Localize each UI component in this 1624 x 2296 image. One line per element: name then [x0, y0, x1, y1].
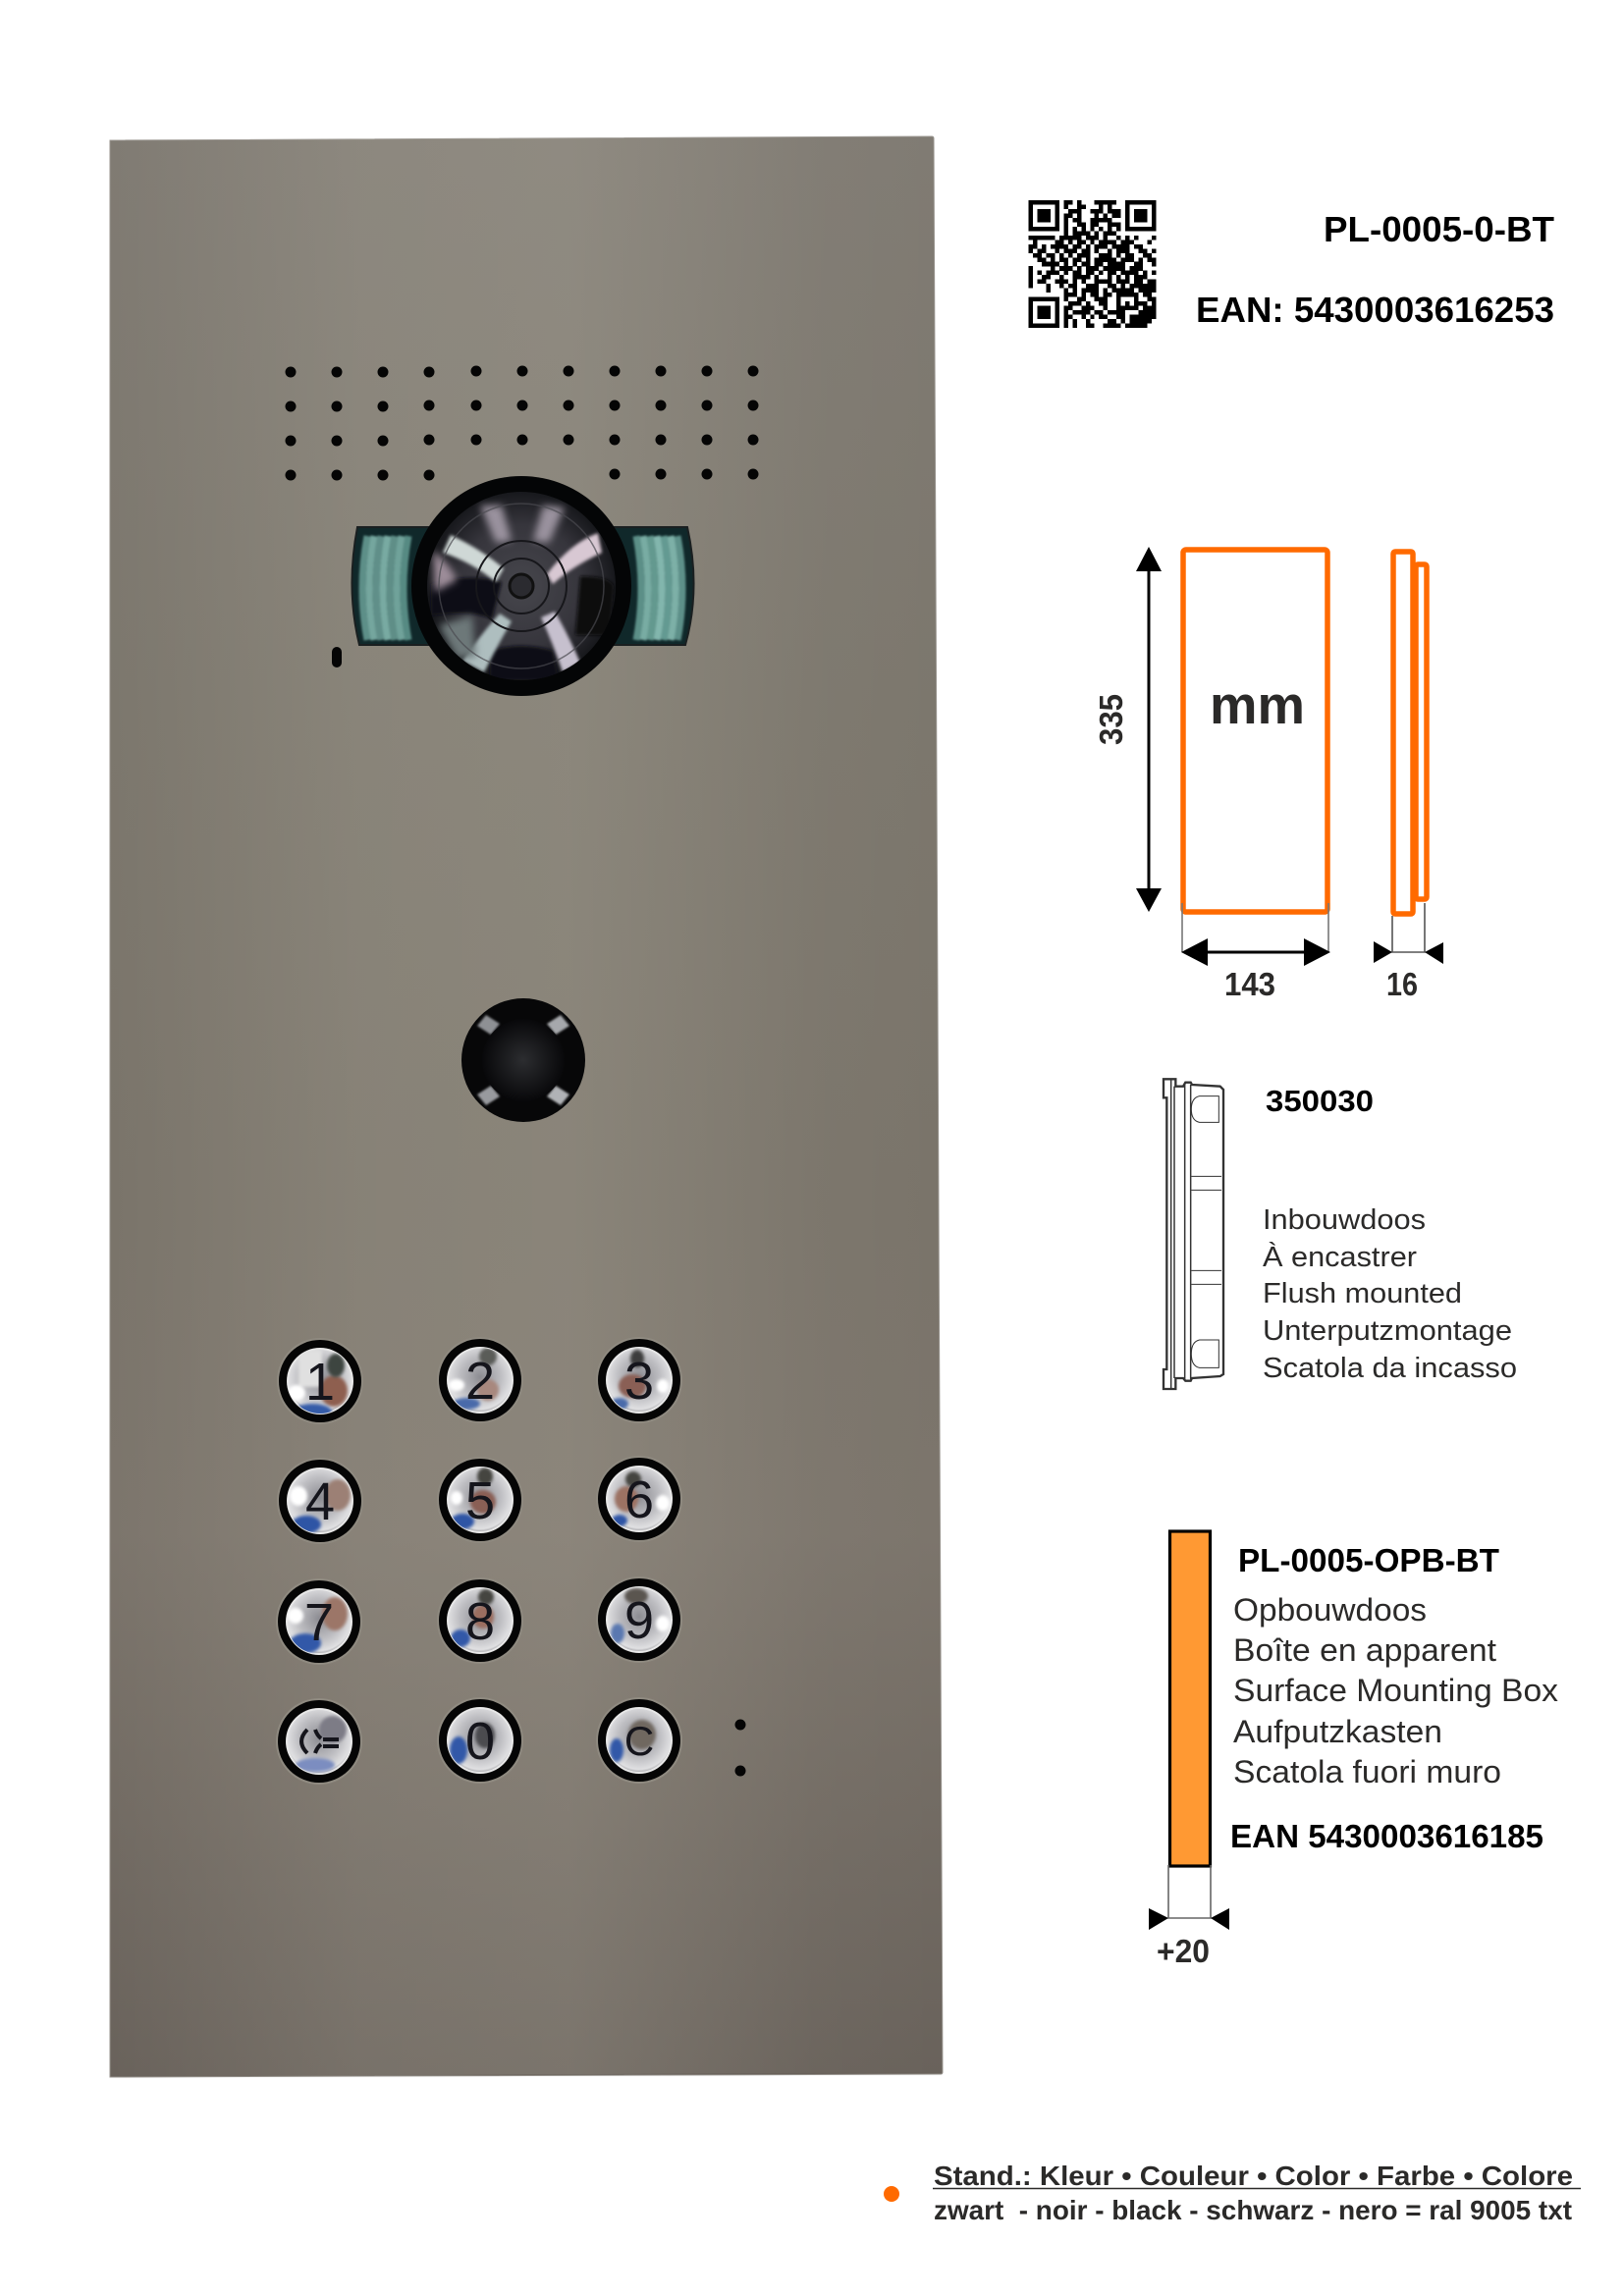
surface box description: Scatola fuori muro: [1233, 1754, 1501, 1789]
icon: right LED window: [604, 527, 694, 645]
surface box description: [1233, 1592, 1558, 1789]
flush box description: Flush mounted: [1263, 1278, 1462, 1309]
keypad: [276, 1337, 682, 1785]
flush box description: Inbouwdoos: [1263, 1204, 1426, 1236]
metal plate: [110, 136, 943, 2077]
colour note: [884, 2161, 1581, 2225]
key 9: 9: [624, 1591, 654, 1650]
key 7: 7: [304, 1593, 334, 1652]
icon: microphone slot: [332, 647, 342, 667]
key 8: 8: [465, 1592, 495, 1651]
plate sheen: [110, 136, 943, 2077]
surface box code: PL-0005-OPB-BT: [1238, 1542, 1499, 1578]
key 2: 2: [465, 1352, 495, 1411]
key 5: 5: [465, 1471, 495, 1530]
key 1: [277, 1338, 363, 1424]
flush box description: [1263, 1204, 1517, 1384]
surface box description: Aufputzkasten: [1233, 1714, 1442, 1749]
key 2: [437, 1337, 523, 1423]
depth arrow: [1374, 903, 1443, 964]
width arrow: [1181, 903, 1330, 966]
key 4: [277, 1458, 363, 1544]
height arrow: [1136, 547, 1162, 912]
depth arrow: [1168, 1865, 1211, 1918]
colour value: zwart - noir - black - schwarz - nero = ral 9005 txt: [934, 2195, 1572, 2225]
icon: camera lens: [411, 476, 631, 696]
flush box description: À encastrer: [1263, 1241, 1417, 1273]
colour heading: Stand.: Kleur • Couleur • Color • Farbe • Colore: [934, 2161, 1573, 2191]
key C: C: [624, 1718, 654, 1764]
key 5: [437, 1457, 523, 1543]
article number: PL-0005-0-BT: [1324, 209, 1554, 249]
QR code: [1029, 202, 1157, 326]
surface box EAN: EAN 5430003616185: [1230, 1818, 1543, 1854]
dimension drawing: [1093, 547, 1443, 1002]
front outline: [1183, 550, 1327, 912]
key 3: 3: [624, 1352, 654, 1411]
key 9: [596, 1576, 682, 1663]
depth label: +20: [1157, 1933, 1210, 1969]
surface box description: Opbouwdoos: [1233, 1592, 1427, 1628]
key 6: [596, 1456, 682, 1542]
flush box code: 350030: [1266, 1084, 1374, 1118]
status LED holes: [734, 1720, 746, 1777]
depth label: 16: [1386, 966, 1418, 1002]
speaker grille holes: [285, 365, 758, 481]
surface box description: Surface Mounting Box: [1233, 1673, 1558, 1708]
key 0: 0: [465, 1712, 495, 1771]
width label: 143: [1224, 966, 1275, 1002]
panel: door station front plate: [110, 136, 943, 2077]
key 3: [596, 1337, 682, 1423]
side outline: [1393, 552, 1427, 914]
orange bar: [1170, 1531, 1210, 1866]
key 1: 1: [305, 1353, 335, 1412]
EAN code: EAN: 5430003616253: [1196, 290, 1554, 330]
key 4: 4: [305, 1472, 335, 1531]
key C: [596, 1697, 682, 1784]
key 7: [276, 1578, 362, 1665]
height label: 335: [1093, 694, 1129, 745]
key: door key symbol: [276, 1698, 362, 1785]
surface box description: Boîte en apparent: [1233, 1632, 1496, 1668]
icon: left LED window: [352, 527, 442, 645]
flush box description: Scatola da incasso: [1263, 1353, 1517, 1384]
key 0: [437, 1697, 523, 1784]
key 8: [437, 1577, 523, 1664]
surface mounting box drawing: [1149, 1531, 1229, 1969]
flush mounting box drawing: [1164, 1079, 1223, 1389]
key 6: 6: [624, 1470, 654, 1529]
colour dot: [884, 2186, 899, 2202]
flush box description: Unterputzmontage: [1263, 1315, 1512, 1347]
icon: black call button: [461, 998, 585, 1122]
unit label: mm: [1210, 674, 1305, 735]
